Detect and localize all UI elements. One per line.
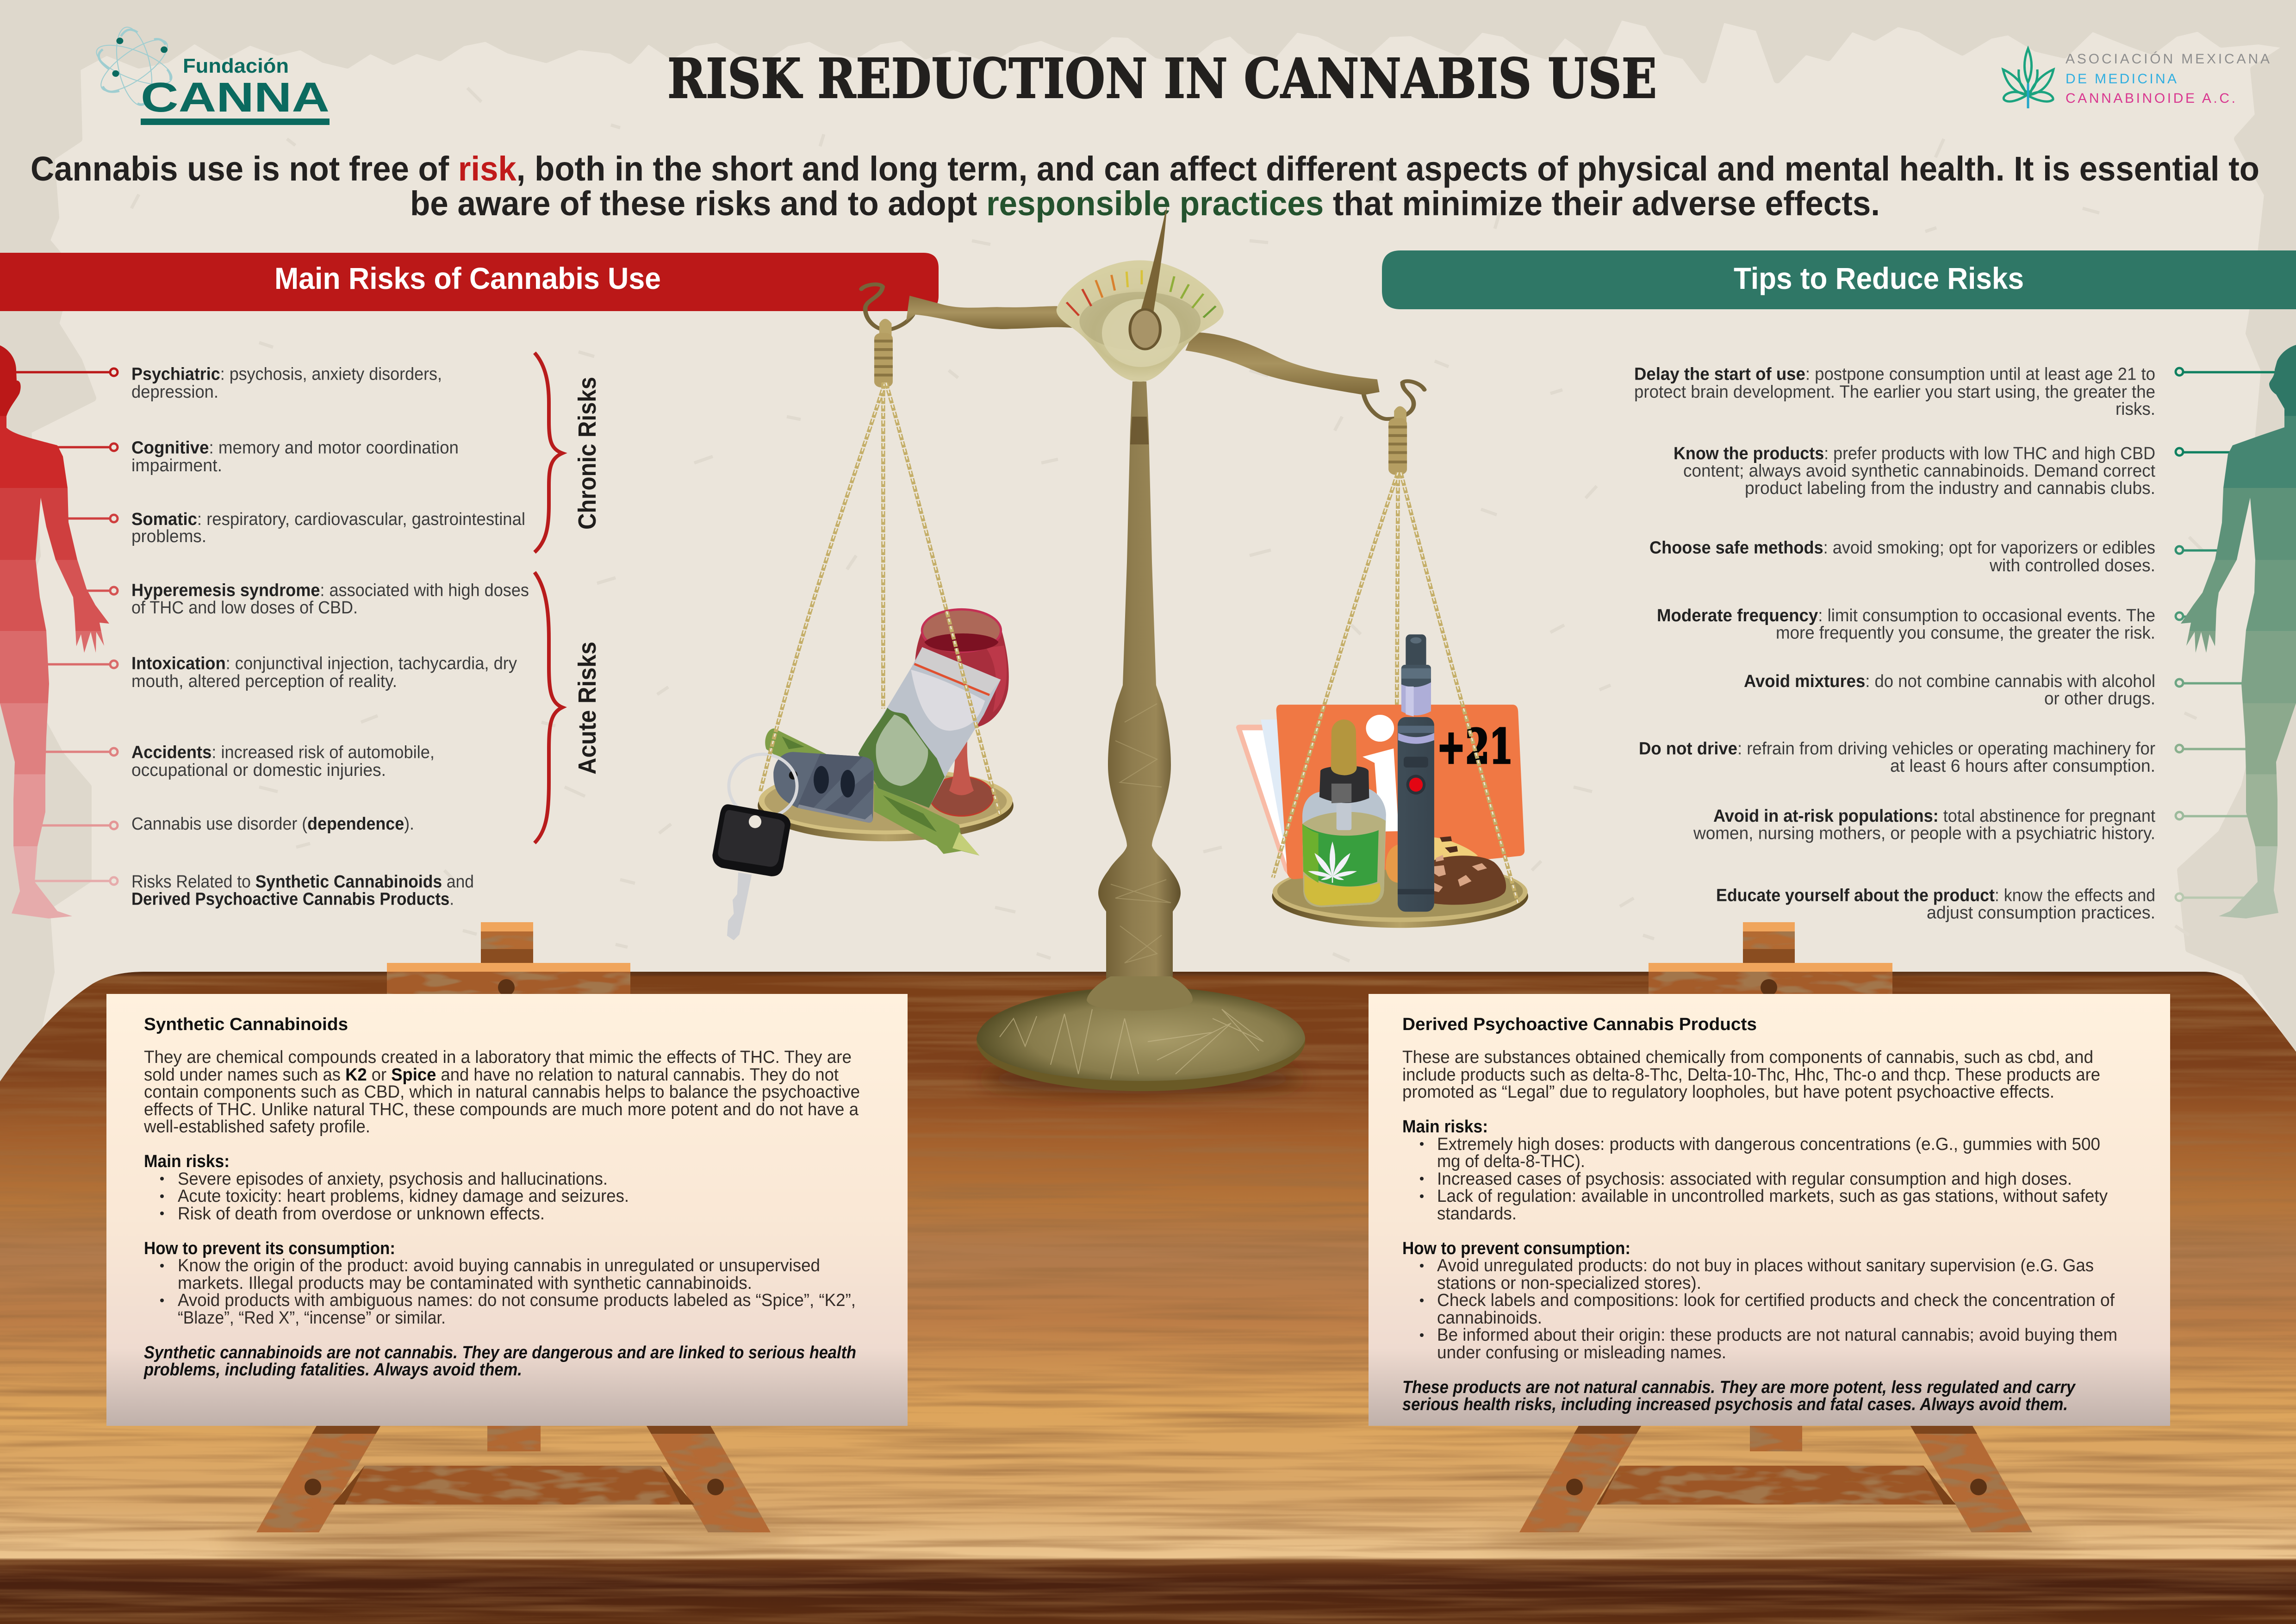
risk list: [131, 365, 529, 909]
connector lines: risks: [5, 369, 118, 885]
banner: Main Risks: [0, 253, 939, 311]
beam: right arm: [1185, 332, 1425, 419]
tips list: Know the products: prefer products with low THC and high CBD: [1674, 444, 2155, 463]
wooden table: [0, 968, 2296, 1624]
panel: synthetic cannabinoids: Know the origin of the product: avoid buying cannabis in unregulated or unsupervised: [178, 1256, 820, 1275]
tips list: protect brain development. The earlier you start using, the greater the: [1634, 382, 2155, 402]
tips list: Avoid mixtures: do not combine cannabis with alcohol: [1744, 672, 2155, 691]
tips list: content; always avoid synthetic cannabinoids. Demand correct: [1683, 461, 2155, 481]
tips list: Do not drive: refrain from driving vehicles or operating machinery for: [1639, 739, 2155, 758]
risk list: Hyperemesis syndrome: associated with high doses: [131, 581, 529, 600]
vape pen: [1398, 634, 1434, 912]
info card with +21: +21: [1437, 720, 1513, 774]
panel: synthetic cannabinoids: [106, 994, 908, 1426]
panel: derived psychoactive products: include products such as delta-8-Thc, Delta-10-Thc, Hhc, Thc-o and thcp. These products are: [1402, 1065, 2100, 1085]
logo: Asociacion Mexicana de Medicina Cannabinoide: CANNABINOIDE A.C.: [2066, 91, 2235, 106]
scale column: [1087, 381, 1193, 1011]
hanger coils: [874, 319, 1407, 475]
panel: synthetic cannabinoids: well-established safety profile.: [143, 1117, 370, 1137]
dropper bottle: [1302, 719, 1386, 907]
panel: derived psychoactive products: promoted as “Legal” due to regulatory loopholes, but have potent psychoactive effects.: [1402, 1082, 2054, 1102]
right easel: [1481, 922, 2073, 1558]
risk list: Derived Psychoactive Cannabis Products.: [131, 890, 454, 909]
front chains: [760, 383, 1518, 903]
info card with +21: [1276, 705, 1524, 879]
panel: derived psychoactive products: Derived Psychoactive Cannabis Products: [1402, 1015, 1757, 1034]
tips list: more frequently you consume, the greater the risk.: [1776, 623, 2155, 643]
tips list: Educate yourself about the product: know the effects and: [1716, 886, 2155, 906]
tips list: product labeling from the industry and cannabis clubs.: [1745, 479, 2155, 498]
panel: synthetic cannabinoids: Risk of death from overdose or unknown effects.: [178, 1204, 545, 1224]
risk list: Accidents: increased risk of automobile,: [131, 743, 435, 762]
logo: Asociacion Mexicana de Medicina Cannabinoide: ASOCIACIÓN MEXICANA: [2066, 51, 2270, 67]
risk list: problems.: [131, 527, 206, 546]
title: RISK REDUCTION IN CANNABIS USE: [667, 46, 1657, 111]
panel: synthetic cannabinoids: contain components such as CBD, which in natural cannabis helps to balance the psychoactive: [144, 1082, 860, 1102]
risk list: Cognitive: memory and motor coordination: [131, 438, 459, 457]
panel: derived psychoactive products: Check labels and compositions: look for certified products and check the concentration of: [1437, 1291, 2115, 1310]
risk list: depression.: [131, 382, 218, 402]
tips list: Avoid in at-risk populations: total abstinence for pregnant: [1713, 806, 2155, 826]
leaflets behind card: [1236, 719, 1289, 877]
panel: synthetic cannabinoids: effects of THC. Unlike natural THC, these compounds are much more potent and do not have a: [144, 1100, 859, 1119]
intro text: be aware of these risks and to adopt responsible practices that minimize their adverse effects.: [410, 184, 1880, 223]
left easel: [222, 922, 796, 1558]
bracket: chronic risks: Chronic Risks: [573, 377, 601, 530]
wine glass: [915, 609, 1009, 816]
center chains: [883, 383, 1398, 709]
intro text: [31, 150, 2259, 223]
panel: derived psychoactive products: standards.: [1437, 1204, 1517, 1224]
panel: derived psychoactive products: under confusing or misleading names.: [1437, 1343, 1726, 1362]
panel: derived psychoactive products: cannabinoids.: [1437, 1308, 1542, 1328]
tips list: women, nursing mothers, or people with a psychiatric history.: [1693, 824, 2155, 843]
tips list: adjust consumption practices.: [1927, 903, 2155, 923]
logo: Fundacion CANNA: Fundación: [183, 55, 289, 77]
scale base: [977, 988, 1305, 1093]
panel: derived psychoactive products: These are substances obtained chemically from components of cannabis, such as cbd, and: [1402, 1048, 2093, 1067]
car key: [712, 752, 874, 940]
logo: Fundacion CANNA: CANNA: [141, 75, 330, 121]
tips list: or other drugs.: [2044, 689, 2155, 708]
panel: derived psychoactive products: mg of delta-8-THC).: [1437, 1152, 1585, 1171]
panel: derived psychoactive products: Be informed about their origin: these products are not natural cannabis; avoid buying them: [1437, 1325, 2117, 1345]
beam: left arm: [861, 284, 1072, 330]
risk list: occupational or domestic injuries.: [131, 761, 386, 780]
right pan: [1272, 862, 1528, 928]
tips list: at least 6 hours after consumption.: [1890, 756, 2155, 776]
intro text: Cannabis use is not free of risk, both in the short and long term, and can affect different aspects of physical and mental health. It is essential to: [31, 150, 2259, 188]
risk list: Intoxication: conjunctival injection, tachycardia, dry: [131, 654, 517, 674]
risk list: of THC and low doses of CBD.: [131, 598, 358, 618]
rolled joint: [765, 728, 979, 856]
logo: Asociacion Mexicana de Medicina Cannabinoide: [2003, 49, 2270, 108]
balance scale illustration: [712, 205, 1528, 1093]
scale arms and dial: [861, 205, 1425, 709]
panel: derived psychoactive products: Main risks:: [1402, 1117, 1488, 1137]
logo: Fundacion CANNA: [91, 25, 330, 125]
panel: synthetic cannabinoids: Acute toxicity: heart problems, kidney damage and seizures.: [178, 1187, 629, 1206]
risk list: Psychiatric: psychosis, anxiety disorders,: [131, 365, 442, 384]
panel: derived psychoactive products: Increased cases of psychosis: associated with regular consumption and high doses.: [1437, 1169, 2072, 1189]
tips list: Delay the start of use: postpone consumption until at least age 21 to: [1634, 365, 2155, 384]
panel: derived psychoactive products: stations or non-specialized stores).: [1437, 1274, 1701, 1293]
left pan: [758, 768, 1014, 841]
tips list: risks.: [2116, 400, 2155, 419]
body figure: red: [0, 345, 109, 918]
panel: derived psychoactive products: serious health risks, including increased psychosis and fatal cases. Always avoid them.: [1402, 1395, 2068, 1414]
body figure: green: [2181, 345, 2296, 918]
panel: synthetic cannabinoids: “Blaze”, “Red X”, “incense” or similar.: [178, 1308, 446, 1328]
logo: Asociacion Mexicana de Medicina Cannabinoide: DE MEDICINA: [2066, 71, 2177, 87]
tips list: Choose safe methods: avoid smoking; opt for vaporizers or edibles: [1649, 538, 2155, 558]
panel: synthetic cannabinoids: Severe episodes of anxiety, psychosis and hallucinations.: [178, 1169, 608, 1189]
risk list: mouth, altered perception of reality.: [131, 672, 397, 691]
bracket: acute risks: Acute Risks: [573, 642, 601, 775]
panel: synthetic cannabinoids: markets. Illegal products may be contaminated with synthetic cannabinoids.: [178, 1274, 752, 1293]
panel: synthetic cannabinoids: sold under names such as K2 or Spice and have no relation to natural cannabis. They do not: [144, 1065, 839, 1085]
banner: Main Risks: Main Risks of Cannabis Use: [274, 261, 661, 295]
panel: derived psychoactive products: Lack of regulation: available in uncontrolled markets, such as gas stations, without safety: [1437, 1187, 2108, 1206]
cookies: [1386, 836, 1506, 905]
left pan items: [712, 609, 1014, 940]
risk list: Risks Related to Synthetic Cannabinoids and: [131, 872, 474, 892]
cannabis bag: [858, 647, 1001, 808]
panel: derived psychoactive products: Avoid unregulated products: do not buy in places without sanitary supervision (e.G. Gas: [1437, 1256, 2094, 1275]
risk list: Cannabis use disorder (dependence).: [131, 814, 414, 834]
dial: [1057, 205, 1224, 381]
panel: synthetic cannabinoids: How to prevent its consumption:: [144, 1239, 395, 1258]
panel: synthetic cannabinoids: Avoid products with ambiguous names: do not consume products labeled as “Spice”, “K2”,: [178, 1291, 856, 1310]
risk list: Somatic: respiratory, cardiovascular, gastrointestinal: [131, 510, 525, 529]
panel: synthetic cannabinoids: They are chemical compounds created in a laboratory that mimic the effects of THC. They are: [144, 1048, 852, 1067]
panel: derived psychoactive products: Extremely high doses: products with dangerous concentrations (e.G., gummies with 500: [1437, 1135, 2100, 1154]
tips list: with controlled doses.: [1989, 556, 2155, 575]
panel: derived psychoactive products: These products are not natural cannabis. They are more potent, less regulated and carry: [1402, 1378, 2076, 1397]
bracket: acute risks: [535, 572, 601, 843]
panel: synthetic cannabinoids: problems, including fatalities. Always avoid them.: [143, 1360, 522, 1380]
risk list: impairment.: [131, 456, 222, 475]
panel: derived psychoactive products: [1369, 994, 2170, 1426]
banner: Tips: [1382, 250, 2296, 309]
panel: synthetic cannabinoids: Synthetic cannabinoids are not cannabis. They are dangerous and are linked to serious health: [144, 1343, 856, 1362]
tips list: [1634, 365, 2155, 923]
connector lines: tips: [2176, 368, 2286, 901]
panel: synthetic cannabinoids: Synthetic Cannabinoids: [144, 1015, 348, 1034]
panel: synthetic cannabinoids: Main risks:: [144, 1152, 230, 1171]
banner: Tips: Tips to Reduce Risks: [1734, 261, 2024, 295]
tips list: Moderate frequency: limit consumption to occasional events. The: [1657, 606, 2155, 625]
bracket: chronic risks: [535, 353, 601, 552]
panel: derived psychoactive products: How to prevent consumption:: [1402, 1239, 1630, 1258]
right pan items: [1236, 634, 1528, 928]
atom icon: [91, 25, 177, 108]
